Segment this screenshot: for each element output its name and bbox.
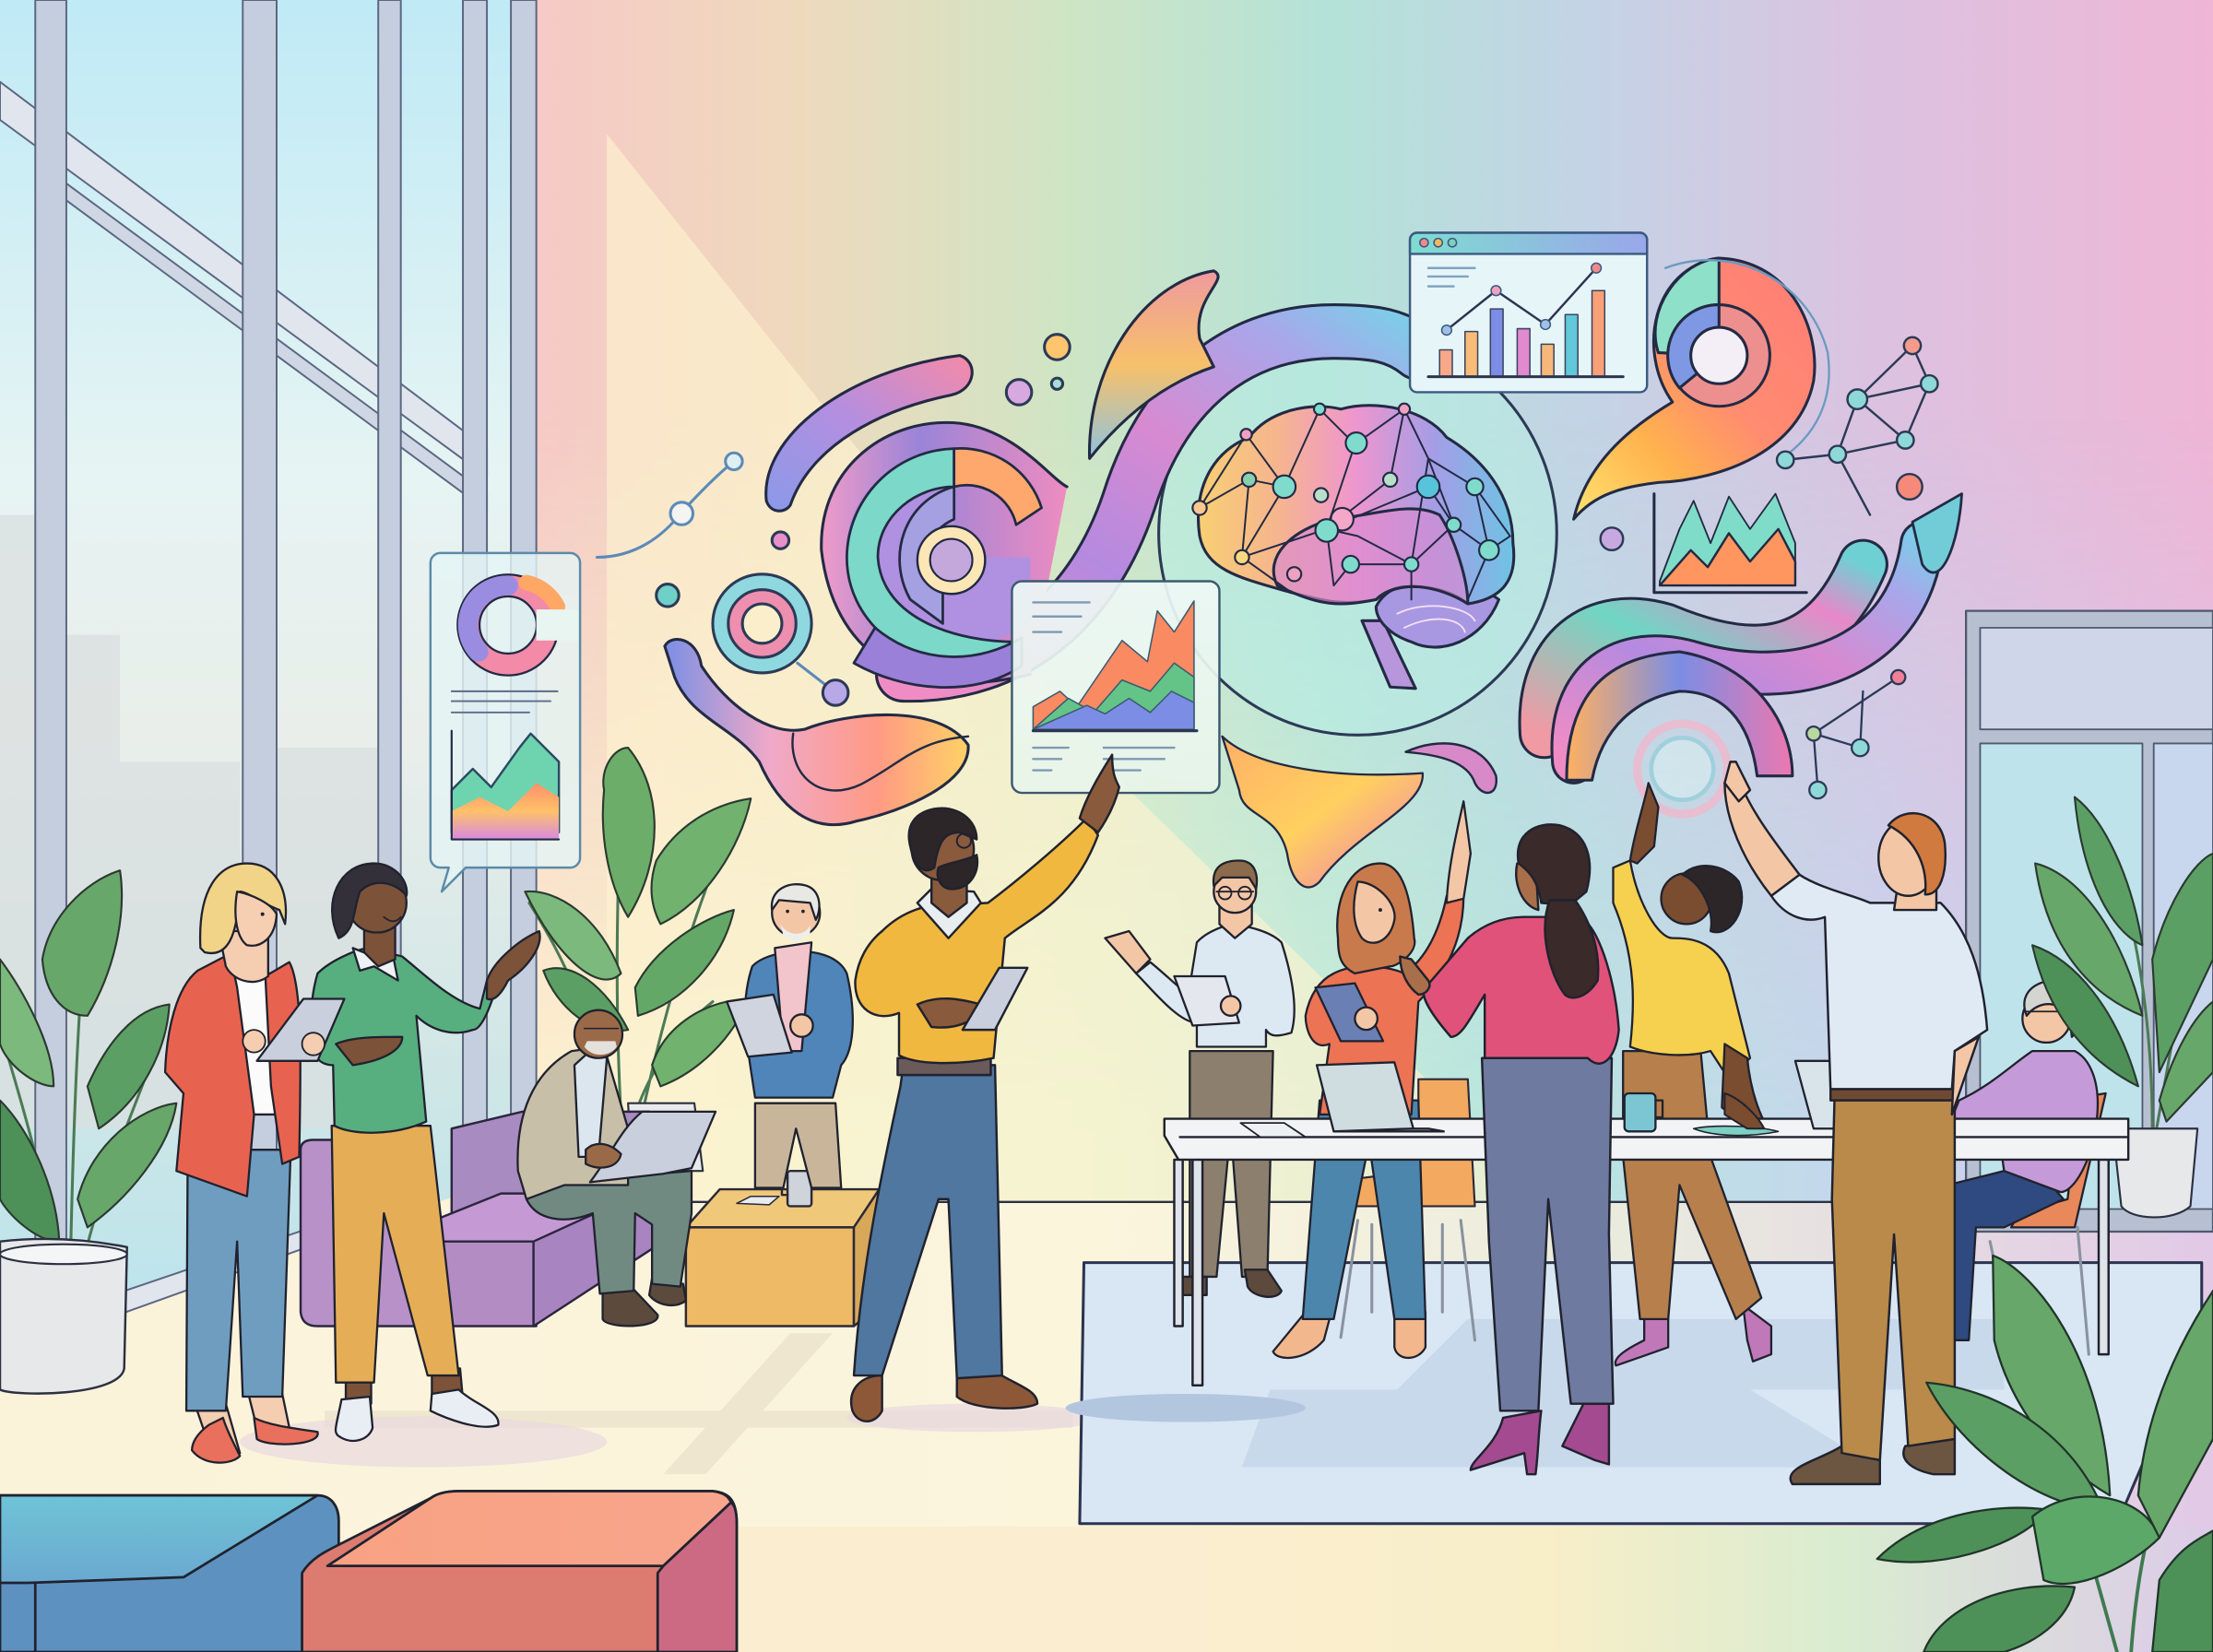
right ribbons	[1544, 494, 1962, 761]
left speech panel	[431, 553, 580, 891]
teal mug	[1625, 1093, 1663, 1131]
lower-left blob	[665, 640, 968, 825]
small donut and nodes	[597, 335, 1070, 705]
woman in green sweater	[310, 864, 540, 1441]
right swoosh donut chart	[1574, 258, 1829, 519]
top-left arc	[766, 356, 972, 511]
purple sofa	[301, 1112, 663, 1326]
blonde woman	[165, 864, 318, 1463]
cerebrum	[1199, 406, 1514, 604]
center potted plant	[525, 748, 751, 1171]
brain	[1192, 404, 1514, 689]
center area chart panel	[1012, 581, 1219, 793]
seated man with laptop	[517, 1010, 716, 1326]
brain network	[1200, 409, 1510, 599]
right room window	[1966, 611, 2213, 1232]
man with glasses and tablet	[1105, 860, 1295, 1297]
orange chair	[1341, 1080, 1474, 1340]
background wall	[440, 0, 2213, 1202]
woman in orange top	[1273, 801, 1471, 1358]
top fin	[1090, 271, 1218, 458]
blue ottoman	[0, 1495, 338, 1652]
yellow woman's hand on table	[1724, 1093, 1764, 1128]
blonde woman's tablet and hands	[243, 998, 344, 1061]
man in blue shirt from behind	[1724, 761, 1987, 1484]
large swirl chart	[822, 422, 1067, 688]
woman in yellow blouse	[1613, 783, 1771, 1365]
network lower right	[1806, 670, 1905, 798]
seated woman at right	[1941, 981, 2106, 1354]
data mural	[431, 233, 1962, 891]
meeting table	[1165, 1119, 2128, 1386]
left potted plant	[0, 870, 176, 1394]
small area chart	[1654, 494, 1806, 593]
foreground plant	[1877, 1256, 2213, 1652]
rainbow arch	[1567, 652, 1793, 814]
man in yellow sweater pointing	[851, 755, 1119, 1422]
laptop on table	[1317, 1061, 1835, 1131]
cerebellum and stem	[1362, 582, 1499, 689]
top dashboard window	[1410, 233, 1647, 392]
central s-ribbon	[904, 332, 1418, 675]
floor	[0, 1202, 2213, 1652]
coffee table with cup	[686, 1171, 880, 1326]
woman in pink from behind	[1400, 824, 1619, 1474]
floor-to-ceiling window	[0, 0, 537, 1357]
standing older man in blue jacket	[727, 884, 853, 1188]
bottom fin	[1223, 737, 1423, 887]
small swirl	[1405, 743, 1497, 793]
glass bubble around brain	[1159, 332, 1556, 735]
right potted plant	[2032, 797, 2213, 1217]
rug	[1066, 1263, 2202, 1524]
coral ottoman	[302, 1492, 737, 1652]
network upper right	[1601, 337, 1938, 550]
